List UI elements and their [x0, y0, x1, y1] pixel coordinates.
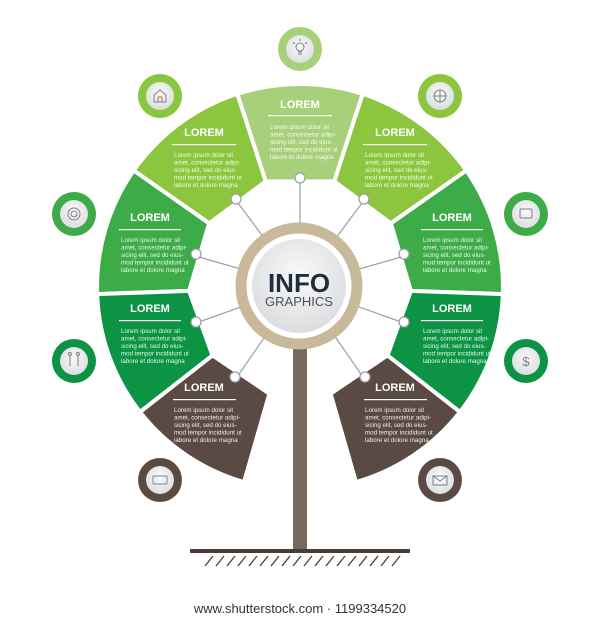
text: top-right: LOREM [375, 127, 415, 139]
text: brown left [173, 382, 242, 444]
text: right lower: sicing elit, sed do eius- [423, 343, 486, 350]
text: left upper: LOREM [130, 212, 170, 224]
stem [293, 330, 307, 552]
text: right lower: amet, consectetur adipi- [423, 336, 489, 342]
text: right lower: LOREM [432, 303, 472, 315]
text: brown right: amet, consectetur adipi- [365, 414, 431, 422]
text: top-left: mod tempor incididunt ut [174, 174, 242, 182]
text: right upper: sicing elit, sed do eius- [423, 252, 486, 259]
text: top-left: amet, consectetur adipi- [174, 160, 240, 166]
text: right upper [421, 212, 491, 274]
text: top-left: Lorem ipsum dolor sit [174, 152, 233, 159]
text: top-left: sicing elit, sed do eius- [174, 167, 237, 174]
text: left upper: labore et dolore magna [121, 267, 185, 274]
text: brown right: labore et dolore magna [365, 437, 429, 444]
text: brown left: Lorem ipsum dolor sit [174, 407, 233, 414]
text: brown left: amet, consectetur adipi- [174, 414, 240, 422]
text: left lower: labore et dolore magna [121, 358, 185, 365]
icons [52, 27, 548, 502]
text: brown right: LOREM [375, 382, 415, 394]
text: brown left: LOREM [184, 382, 224, 394]
text: brown right: sicing elit, sed do eius- [365, 422, 428, 429]
text: top: amet, consectetur adipi- [270, 132, 336, 138]
text: left upper: Lorem ipsum dolor sit [121, 237, 180, 244]
text: left upper: mod tempor incididunt ut [121, 260, 189, 266]
text: top: Lorem ipsum dolor sit [270, 124, 329, 131]
icon glyphs: $ [522, 354, 530, 369]
text: top-right: mod tempor incididunt ut [365, 174, 433, 182]
text: top-left [172, 127, 242, 189]
text: top-right [363, 127, 433, 189]
text: left lower: LOREM [130, 303, 170, 315]
text: left lower: amet, consectetur adipi- [121, 336, 187, 342]
connector lines [196, 181, 404, 377]
text: right upper: amet, consectetur adipi- [423, 244, 489, 252]
text: top-right: Lorem ipsum dolor sit [365, 152, 424, 159]
text: brown right: mod tempor incididunt ut [365, 430, 433, 436]
text: right lower [421, 303, 491, 365]
segments [97, 84, 503, 482]
text: right lower: Lorem ipsum dolor sit [423, 328, 482, 335]
text: brown right: Lorem ipsum dolor sit [365, 407, 424, 414]
text: brown right [364, 382, 433, 444]
text: left lower: sicing elit, sed do eius- [121, 343, 184, 350]
text: brown left: labore et dolore magna [174, 437, 238, 444]
text: left lower: mod tempor incididunt ut [121, 350, 189, 358]
text: left lower [119, 303, 189, 365]
text: top: mod tempor incididunt ut [270, 146, 338, 154]
text: top [268, 99, 338, 161]
text: left upper: sicing elit, sed do eius- [121, 252, 184, 259]
footer: www.shutterstock.com · 1199334520 [193, 601, 406, 616]
text: brown left: mod tempor incididunt ut [174, 430, 242, 436]
center badge: INFO [268, 268, 330, 298]
text: top-left: LOREM [184, 127, 224, 139]
text: right upper: Lorem ipsum dolor sit [423, 237, 482, 244]
text: top-right: amet, consectetur adipi- [365, 160, 431, 166]
text: right lower: mod tempor incididunt ut [423, 350, 491, 358]
text: top: labore et dolore magna [270, 154, 334, 161]
ground [190, 549, 410, 566]
center badge [241, 228, 357, 344]
text: brown left: sicing elit, sed do eius- [174, 422, 237, 429]
text: top: sicing elit, sed do eius- [270, 139, 333, 146]
center badge: GRAPHICS [265, 294, 333, 309]
text: right upper: labore et dolore magna [423, 267, 487, 274]
text: right upper: mod tempor incididunt ut [423, 260, 491, 266]
icon glyphs [68, 39, 532, 485]
text: top-right: labore et dolore magna [365, 182, 429, 189]
text: top-left: labore et dolore magna [174, 182, 238, 189]
text: left upper: amet, consectetur adipi- [121, 244, 187, 252]
text: left upper [119, 212, 189, 274]
text: top: LOREM [280, 99, 320, 111]
text: left lower: Lorem ipsum dolor sit [121, 328, 180, 335]
text: top-right: sicing elit, sed do eius- [365, 167, 428, 174]
nodes [191, 173, 409, 382]
text: right lower: labore et dolore magna [423, 358, 487, 365]
text: right upper: LOREM [432, 212, 472, 224]
